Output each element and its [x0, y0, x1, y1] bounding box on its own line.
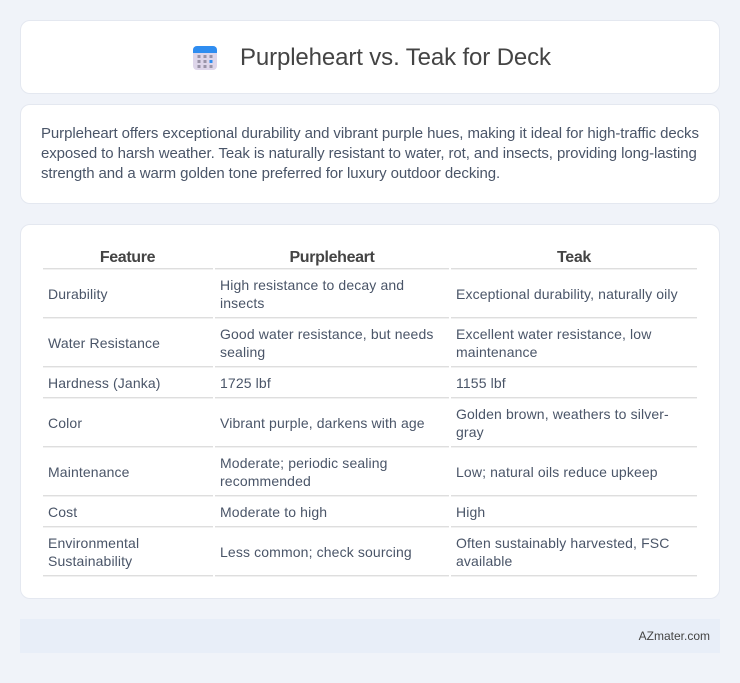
table: recommended [220, 473, 311, 489]
header: Feature: Feature [100, 249, 155, 266]
row: Water Resistance: Water Resistance [48, 335, 160, 351]
table: Moderate to high [220, 504, 327, 520]
table: insects [220, 295, 264, 311]
table: Good water resistance, but needs [220, 326, 434, 342]
header: Purpleheart: Purpleheart [289, 249, 375, 266]
title: Purpleheart vs. Teak for Deck [240, 44, 551, 71]
header: Teak: Teak [557, 249, 591, 266]
footer bar [20, 619, 720, 653]
table: Vibrant purple, darkens with age [220, 415, 425, 431]
row: Cost: Cost [48, 504, 77, 520]
footer credit: AZmater.com [639, 629, 710, 643]
row: Color: Color [48, 415, 82, 431]
comparison table panel [20, 224, 720, 599]
table: Golden brown, weathers to silver- [456, 406, 669, 422]
table: High resistance to decay and [220, 277, 404, 293]
table: sealing [220, 344, 265, 360]
summary text: strength and a warm golden tone preferred for luxury outdoor decking. [41, 165, 500, 182]
table: 1155 lbf [456, 375, 506, 391]
table: Less common; check sourcing [220, 544, 412, 560]
table: High [456, 504, 485, 520]
summary text: Purpleheart offers exceptional durability and vibrant purple hues, making it ideal for high-traffic decks [41, 125, 699, 142]
table: Moderate; periodic sealing [220, 455, 388, 471]
title panel [20, 20, 720, 94]
table: Often sustainably harvested, FSC [456, 535, 669, 551]
table: available [456, 553, 512, 569]
table: Low; natural oils reduce upkeep [456, 464, 658, 480]
summary panel [20, 104, 720, 204]
row: Durability: Durability [48, 286, 108, 302]
row: Environmental Sustainability: Environmental [48, 535, 139, 551]
table: 1725 lbf [220, 375, 271, 391]
table: Exceptional durability, naturally oily [456, 286, 678, 302]
summary text: exposed to harsh weather. Teak is naturally resistant to water, rot, and insects, providing long-lasting [41, 145, 697, 162]
row: Hardness: Hardness (Janka) [48, 375, 161, 391]
row: Environmental Sustainability [48, 535, 139, 569]
table: maintenance [456, 344, 538, 360]
summary text [41, 125, 699, 182]
table: gray [456, 424, 484, 440]
row: Environmental Sustainability: Sustainability [48, 553, 132, 569]
table: Excellent water resistance, low [456, 326, 651, 342]
row: Maintenance: Maintenance [48, 464, 130, 480]
icon: calendar [193, 46, 217, 70]
